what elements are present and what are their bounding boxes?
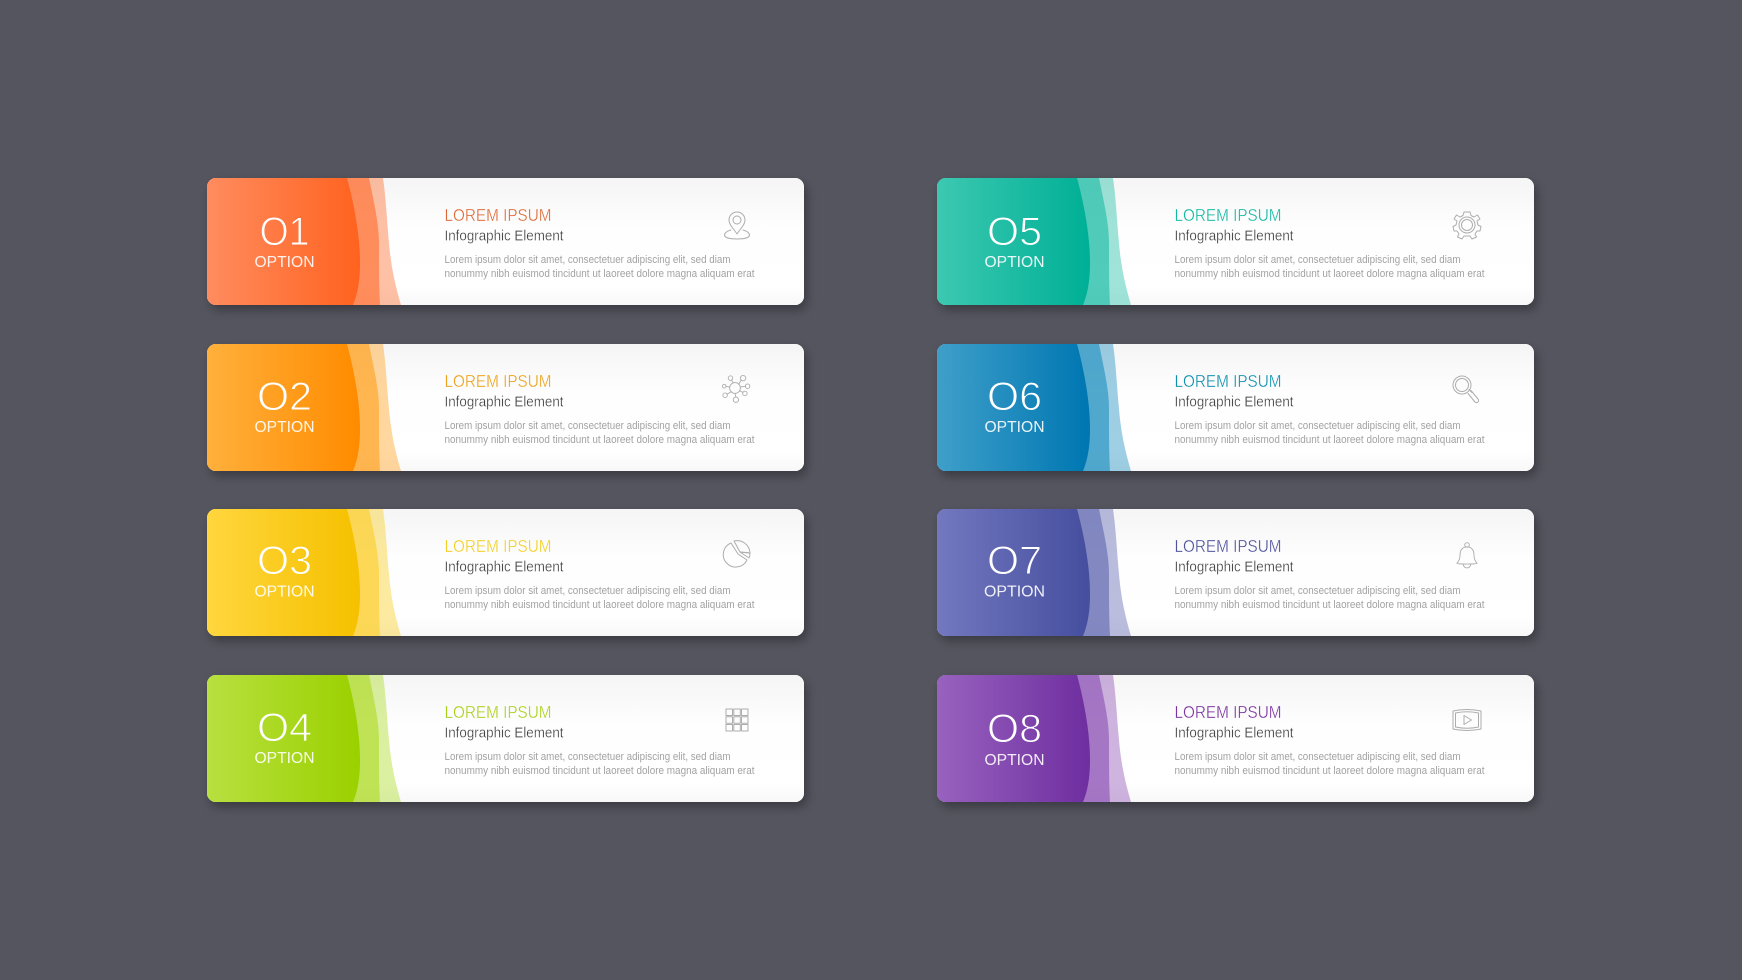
number 04: O4 <box>257 706 312 750</box>
icon: bell <box>1457 543 1477 568</box>
body text <box>1174 254 1484 280</box>
panel: option 03 <box>207 509 804 636</box>
body text: nonummy nibh euismod tincidunt ut laoreet dolore magna aliquam erat <box>1174 765 1484 777</box>
number 02: O2 <box>257 375 312 419</box>
body text: Lorem ipsum dolor sit amet, consectetuer adipiscing elit, sed diam <box>1174 751 1460 763</box>
option label: OPTION <box>984 419 1044 436</box>
body text <box>444 751 754 777</box>
panel: option 08 <box>937 675 1534 802</box>
option label: OPTION <box>254 419 314 436</box>
body text: nonummy nibh euismod tincidunt ut laoreet dolore magna aliquam erat <box>444 434 754 446</box>
number 08: O8 <box>987 707 1042 751</box>
number 06: O6 <box>987 375 1042 419</box>
heading: LOREM IPSUM <box>444 371 552 391</box>
option label: OPTION <box>254 750 314 767</box>
body text: nonummy nibh euismod tincidunt ut laoreet dolore magna aliquam erat <box>1174 434 1484 446</box>
body text: Lorem ipsum dolor sit amet, consectetuer adipiscing elit, sed diam <box>1174 420 1460 432</box>
panel: option 04 <box>207 675 804 802</box>
option label: OPTION <box>254 584 314 600</box>
subheading: Infographic Element <box>444 726 564 742</box>
body text: Lorem ipsum dolor sit amet, consectetuer adipiscing elit, sed diam <box>444 751 730 763</box>
panel: option 01 <box>207 178 804 305</box>
number 07: O7 <box>987 539 1042 583</box>
body text: nonummy nibh euismod tincidunt ut laoreet dolore magna aliquam erat <box>1174 599 1484 611</box>
subheading: Infographic Element <box>1174 394 1294 410</box>
icon: map pin <box>724 212 750 239</box>
icon: magnifying glass <box>1453 376 1479 403</box>
heading: LOREM IPSUM <box>1174 371 1282 391</box>
heading: LOREM IPSUM <box>1174 205 1282 225</box>
option label: OPTION <box>984 254 1044 271</box>
number 01: O1 <box>260 210 310 254</box>
number 05: O5 <box>987 210 1042 254</box>
number 03: O3 <box>257 539 312 583</box>
panel: option 02 <box>207 344 804 471</box>
subheading: Infographic Element <box>444 228 564 244</box>
icon: network <box>722 375 750 402</box>
body text <box>444 254 754 280</box>
heading: LOREM IPSUM <box>444 205 552 225</box>
body text: Lorem ipsum dolor sit amet, consectetuer adipiscing elit, sed diam <box>444 420 730 432</box>
subheading: Infographic Element <box>444 560 564 576</box>
body text: Lorem ipsum dolor sit amet, consectetuer adipiscing elit, sed diam <box>1174 254 1460 266</box>
body text: nonummy nibh euismod tincidunt ut laoreet dolore magna aliquam erat <box>444 765 754 777</box>
body text <box>1174 420 1484 446</box>
heading: LOREM IPSUM <box>1174 536 1282 556</box>
icon: grid <box>726 709 748 731</box>
body text: Lorem ipsum dolor sit amet, consectetuer adipiscing elit, sed diam <box>1174 585 1460 597</box>
body text: Lorem ipsum dolor sit amet, consectetuer adipiscing elit, sed diam <box>444 585 730 597</box>
subheading: Infographic Element <box>1174 228 1294 244</box>
subheading: Infographic Element <box>1174 726 1294 742</box>
panel: option 07 <box>937 509 1534 636</box>
heading: LOREM IPSUM <box>444 536 552 556</box>
option label: OPTION <box>254 254 314 271</box>
option label: OPTION <box>984 584 1045 600</box>
heading: LOREM IPSUM <box>444 702 552 722</box>
option label: OPTION <box>984 752 1044 769</box>
body text: Lorem ipsum dolor sit amet, consectetuer adipiscing elit, sed diam <box>444 254 730 266</box>
panel: option 05 <box>937 178 1534 305</box>
body text: nonummy nibh euismod tincidunt ut laoreet dolore magna aliquam erat <box>444 599 754 611</box>
body text: nonummy nibh euismod tincidunt ut laoreet dolore magna aliquam erat <box>444 268 754 280</box>
body text: nonummy nibh euismod tincidunt ut laoreet dolore magna aliquam erat <box>1174 268 1484 280</box>
subheading: Infographic Element <box>444 394 564 410</box>
heading: LOREM IPSUM <box>1174 702 1282 722</box>
body text <box>1174 585 1484 611</box>
subheading: Infographic Element <box>1174 560 1294 576</box>
body text <box>1174 751 1484 777</box>
icon: gear <box>1453 212 1481 239</box>
body text <box>444 420 754 446</box>
icon: video player <box>1453 710 1481 730</box>
panel: option 06 <box>937 344 1534 471</box>
body text <box>444 585 754 611</box>
icon: pie chart <box>723 541 750 567</box>
